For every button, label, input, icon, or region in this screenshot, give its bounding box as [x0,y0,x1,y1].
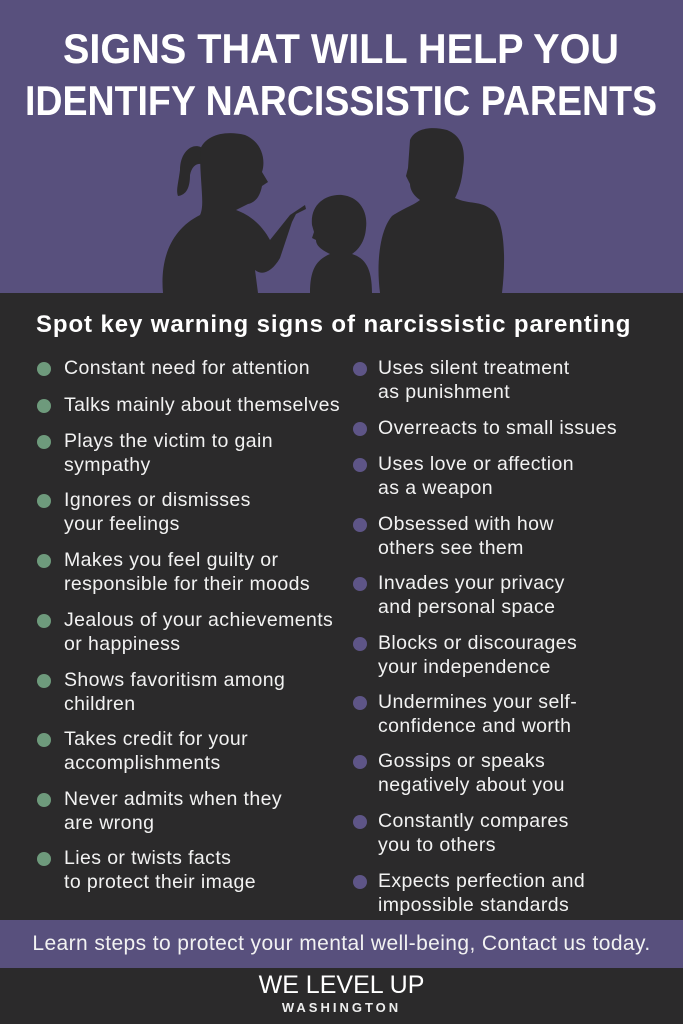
title: SIGNS THAT WILL HELP YOU [63,25,619,72]
list: left column [37,357,340,892]
list: left column: Jealous of your achievements [64,609,333,631]
list: right column: Overreacts to small issues [378,417,617,439]
list: right column: Uses silent treatment [378,357,570,379]
list: left column: are wrong [64,812,154,834]
footer logo: WASHINGTON [282,1000,401,1015]
list: left column: accomplishments [64,752,221,774]
list: right column: negatively about you [378,774,565,796]
list: left column: or happiness [64,632,180,654]
footer logo: WE LEVEL UP [259,971,424,999]
list: left column: your feelings [64,512,180,534]
list: left column: children [64,692,136,714]
list: left column: Never admits when they [64,788,282,810]
list: right column: confidence and worth [378,714,571,736]
list: left column: Lies or twists facts [64,847,231,869]
list: left column: Shows favoritism among [64,669,285,691]
call to action banner: Learn steps to protect your mental well-being, Contact us today. [32,932,651,955]
list: right column: Obsessed with how [378,513,554,535]
list: left column: sympathy [64,454,151,476]
list: right column: others see them [378,536,524,558]
list: left column: Constant need for attention [64,357,310,379]
list: left column: responsible for their moods [64,572,310,594]
list: right column: as a weapon [378,476,493,498]
list: right column: impossible standards [378,894,569,916]
list: right column: your independence [378,656,551,678]
list: left column: Ignores or dismisses [64,489,251,511]
list: right column: and personal space [378,596,555,618]
list: right column: Invades your privacy [378,572,565,594]
list: left column: Talks mainly about themselves [64,394,340,416]
list: right column [353,357,617,916]
list: right column: Expects perfection and [378,870,585,892]
call to action banner [0,920,683,968]
list: right column: Undermines your self- [378,691,577,713]
list: right column: Blocks or discourages [378,632,577,654]
list: left column: Takes credit for your [64,728,248,750]
title [25,25,657,124]
subtitle: Spot key warning signs of narcissistic parenting [36,311,631,338]
header panel [0,0,683,293]
list: left column: Plays the victim to gain [64,430,273,452]
list: right column: Gossips or speaks [378,750,545,772]
list: right column: you to others [378,834,496,856]
list: right column: Uses love or affection [378,453,574,475]
list: right column: as punishment [378,380,510,402]
list: left column: Makes you feel guilty or [64,549,278,571]
footer logo [258,971,424,1015]
list: right column: Constantly compares [378,810,569,832]
list: left column: to protect their image [64,870,256,892]
illustration: family silhouettes [162,128,504,293]
